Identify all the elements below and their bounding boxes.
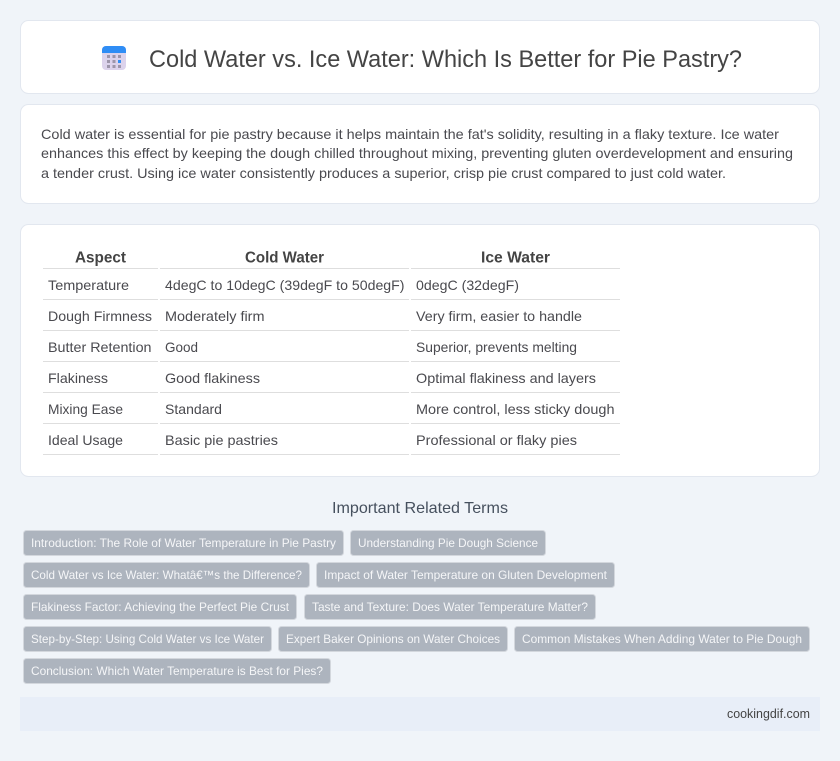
row: butter retention: Butter Retention [48, 339, 152, 355]
footer [20, 697, 820, 731]
row: mixing ease: Standard [165, 401, 222, 417]
row: ideal usage: Professional or flaky pies [416, 432, 577, 448]
intro text: enhances this effect by keeping the dough chilled throughout mixing, preventing gluten overdevelopment and ensuring [41, 145, 793, 161]
related term tags: Common Mistakes When Adding Water to Pie Dough [522, 632, 802, 646]
row: temperature [48, 277, 519, 293]
panel: comparison table [20, 224, 820, 476]
table header: Aspect [75, 250, 127, 266]
heading: important related terms: Important Related Terms [332, 500, 508, 517]
row: mixing ease [48, 401, 614, 417]
row: mixing ease: More control, less sticky dough [416, 401, 614, 417]
title: Cold Water vs. Ice Water: Which Is Better for Pie Pastry? [149, 46, 742, 73]
row: temperature: 4degC to 10degC (39degF to 50degF) [165, 277, 404, 293]
table header [75, 250, 550, 266]
row: dough firmness: Very firm, easier to handle [416, 308, 582, 324]
related term tags: Step-by-Step: Using Cold Water vs Ice Water [31, 632, 264, 646]
related term tags: Expert Baker Opinions on Water Choices [286, 632, 500, 646]
intro text: a tender crust. Using ice water consistently produces a superior, crisp pie crust compared to just cold water. [41, 165, 726, 181]
panel: title header [20, 20, 820, 94]
row: dough firmness [48, 308, 582, 324]
related term tags: Impact of Water Temperature on Gluten Development [324, 568, 608, 582]
row: dough firmness: Moderately firm [165, 308, 264, 324]
row: ideal usage [48, 432, 577, 448]
related term tags: Taste and Texture: Does Water Temperature Matter? [312, 600, 588, 614]
table header: Ice Water [481, 250, 550, 266]
row: butter retention: Good [165, 339, 198, 355]
related term tags: Introduction: The Role of Water Temperature in Pie Pastry [31, 536, 336, 550]
related term tags: Cold Water vs Ice Water: Whatâ€™s the Difference? [31, 568, 302, 582]
related term tags: Conclusion: Which Water Temperature is Best for Pies? [31, 664, 323, 678]
row: butter retention [48, 339, 577, 355]
row: dough firmness: Dough Firmness [48, 308, 152, 324]
row: flakiness [48, 370, 596, 386]
table header: Cold Water [245, 250, 324, 266]
related term tags: Flakiness Factor: Achieving the Perfect Pie Crust [31, 600, 290, 614]
row: ideal usage: Ideal Usage [48, 432, 123, 448]
row: flakiness: Optimal flakiness and layers [416, 370, 596, 386]
row: mixing ease: Mixing Ease [48, 401, 123, 417]
icon: calendar [102, 46, 126, 70]
row: temperature: 0degC (32degF) [416, 277, 519, 293]
row: butter retention: Superior, prevents melting [416, 339, 577, 355]
related term tags [24, 530, 810, 684]
row: flakiness: Flakiness [48, 370, 108, 386]
panel: introduction [20, 104, 820, 204]
footer: cookingdif.com [727, 706, 810, 721]
row: flakiness: Good flakiness [165, 370, 260, 386]
row: ideal usage: Basic pie pastries [165, 432, 278, 448]
row: temperature: Temperature [48, 277, 129, 293]
intro text [41, 126, 793, 181]
related term tags: Understanding Pie Dough Science [358, 536, 538, 550]
intro text: Cold water is essential for pie pastry because it helps maintain the fat's solidity, resulting in a flaky texture. Ice water [41, 126, 779, 142]
